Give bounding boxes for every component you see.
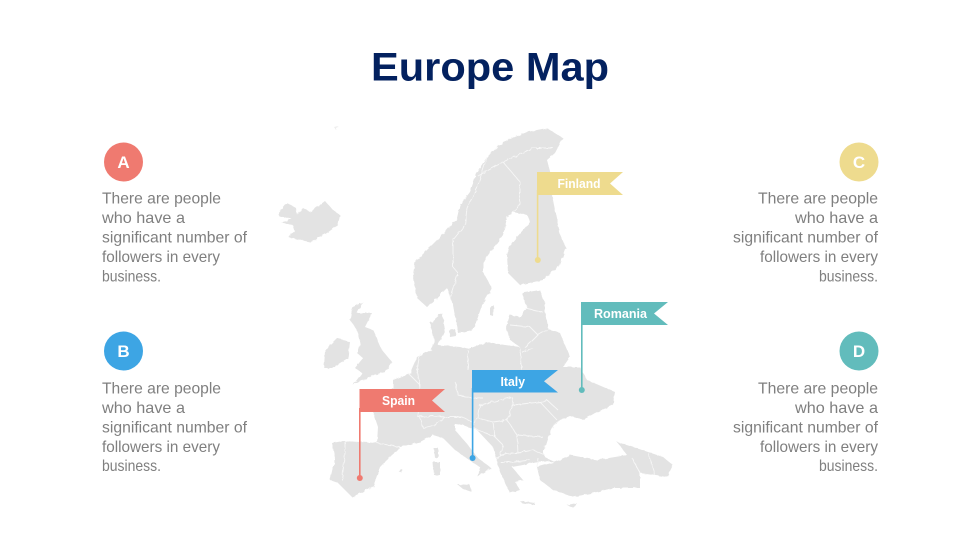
flag: Romania: Romania (594, 306, 648, 321)
text block D: significant number of (733, 420, 879, 436)
badge C (840, 142, 878, 182)
map of Europe (278, 126, 673, 508)
text block B: followers in every (102, 439, 220, 456)
text block A: There are people (102, 190, 221, 208)
text block D: followers in every (760, 439, 878, 456)
panel: A (101, 142, 248, 286)
text block C: followers in every (760, 249, 878, 266)
text block A: business. (102, 268, 161, 286)
badge A (104, 142, 143, 182)
text block C: There are people (758, 190, 878, 208)
text block A: followers in every (102, 249, 220, 266)
text block A: who have a (101, 210, 185, 227)
text block C (733, 190, 879, 286)
text block B: There are people (102, 380, 221, 398)
text block B: significant number of (102, 420, 248, 436)
text block C: who have a (794, 210, 878, 227)
text block D: who have a (794, 400, 878, 417)
text block D: There are people (758, 380, 878, 398)
text block B (101, 380, 248, 475)
panel: D (733, 332, 879, 475)
text block A: significant number of (102, 230, 248, 246)
badge B: B (117, 342, 130, 361)
badge D (840, 332, 878, 370)
badge A: A (117, 153, 130, 172)
text block A (101, 190, 248, 286)
flag: Finland (535, 172, 623, 263)
text block D: business. (819, 458, 878, 475)
flag: Finland: Finland (558, 176, 601, 191)
panel: B (101, 332, 248, 475)
text block D (733, 380, 879, 475)
text block B: who have a (101, 400, 185, 417)
flag: Spain: Spain (382, 393, 415, 408)
text block C: business. (819, 268, 878, 286)
text block C: significant number of (733, 230, 879, 246)
title: Europe Map (371, 46, 609, 90)
badge B (104, 332, 143, 370)
flag: Romania (579, 302, 668, 393)
badge C: C (853, 153, 865, 172)
text block B: business. (102, 458, 161, 475)
flag: Italy (470, 370, 558, 461)
panel: C (733, 142, 879, 286)
flag: Italy: Italy (500, 374, 526, 389)
badge D: D (853, 342, 865, 361)
flag: Spain (357, 389, 445, 481)
